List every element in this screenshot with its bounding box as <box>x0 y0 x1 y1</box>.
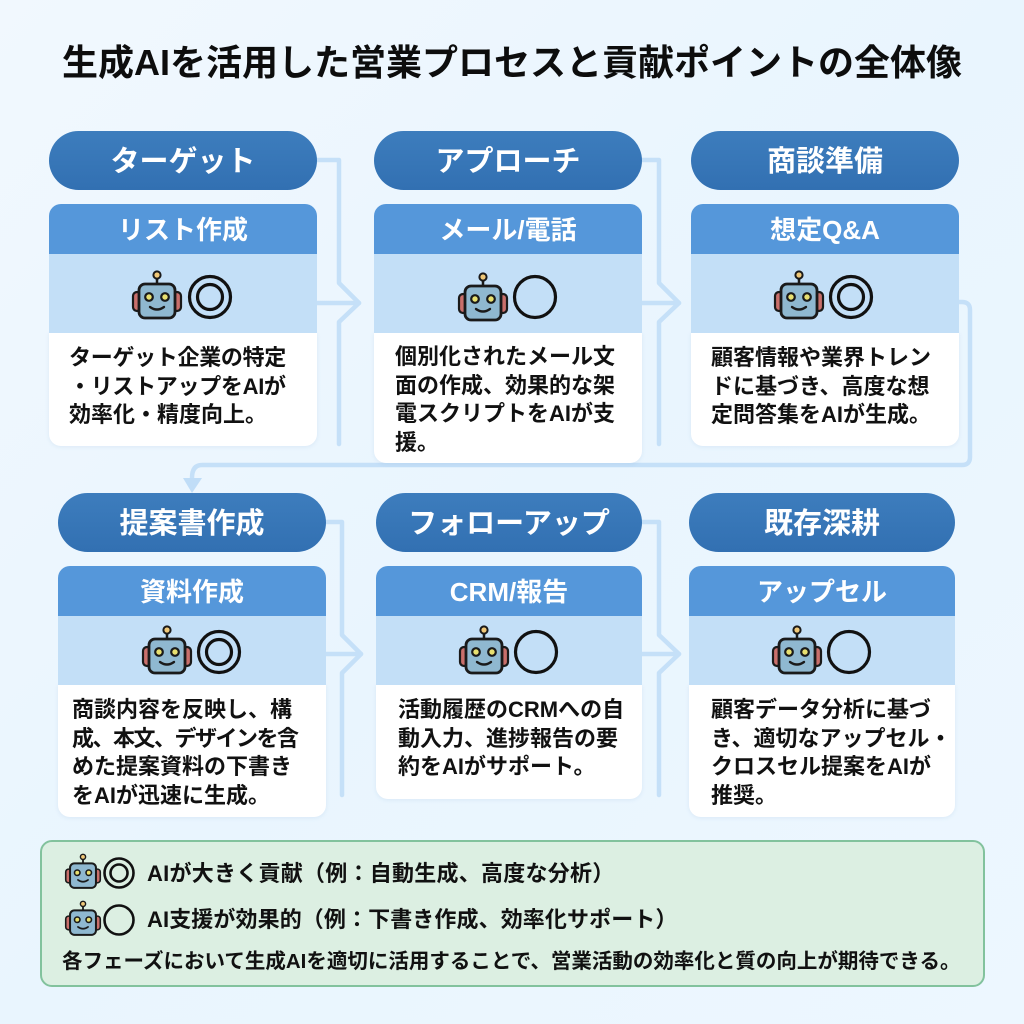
icon: large contribution <box>64 854 135 889</box>
panel: 提案書作成 <box>58 493 326 818</box>
panel: アプローチ: 電スクリプトをAIが支 <box>395 401 615 426</box>
panel: フォローアップ <box>376 493 642 800</box>
panel: 商談準備 <box>690 131 960 448</box>
panel: アプローチ: メール/電話 <box>439 215 577 245</box>
panel: ターゲット: 効率化・精度向上。 <box>69 402 267 427</box>
panel: 既存深耕: 推奨。 <box>711 782 777 808</box>
panel: legend <box>40 840 985 987</box>
panel: ターゲット <box>48 131 318 448</box>
panel: 提案書作成: 商談内容を反映し、構 <box>72 697 292 722</box>
panel: フォローアップ: 活動履歴のCRMへの自 <box>398 697 624 722</box>
title: 生成AIを活用した営業プロセスと貢献ポイントの全体像 <box>62 42 962 83</box>
panel: 提案書作成: をAIが迅速に生成。 <box>72 782 270 808</box>
panel: フォローアップ: 動入力、進捗報告の要 <box>398 726 618 750</box>
panel: アプローチ: 面の作成、効果的な架 <box>395 372 615 398</box>
panel: 商談準備: 商談準備 <box>767 146 883 178</box>
panel: 商談準備: ドに基づき、高度な想 <box>711 374 929 398</box>
panel: 商談準備: 想定Q&A <box>770 215 880 245</box>
panel: 提案書作成: 提案書作成 <box>119 508 264 540</box>
panel: アプローチ: 援。 <box>395 430 439 454</box>
panel: フォローアップ: フォローアップ <box>408 508 610 540</box>
panel: 既存深耕 <box>688 493 956 818</box>
panel: 既存深耕: アップセル <box>757 577 887 607</box>
panel: ターゲット: ターゲット企業の特定 <box>69 345 286 370</box>
panel: フォローアップ: 約をAIがサポート。 <box>398 754 596 779</box>
legend text: large contribution: AIが大きく貢献（例：自動生成、高度な分析） <box>147 861 615 886</box>
panel: 既存深耕: 顧客データ分析に基づ <box>711 697 931 722</box>
panel: ターゲット: ターゲット <box>110 146 256 178</box>
panel: 既存深耕: 既存深耕 <box>764 508 880 540</box>
panel: 既存深耕: クロスセル提案をAIが <box>711 754 931 779</box>
panel: 商談準備: 顧客情報や業界トレン <box>711 345 931 370</box>
panel: 既存深耕: き、適切なアップセル・ <box>711 726 951 750</box>
panel: アプローチ: アプローチ <box>435 146 580 178</box>
panel: 提案書作成: 成、本文、デザインを含 <box>72 726 298 750</box>
panel: ターゲット: ・リストアップをAIが <box>69 374 286 398</box>
panel: フォローアップ: CRM/報告 <box>450 577 568 607</box>
panel: 提案書作成: めた提案資料の下書き <box>72 754 292 779</box>
panel: 提案書作成: 資料作成 <box>140 577 244 607</box>
legend text: effective support: AI支援が効果的（例：下書き作成、効率化サポート） <box>147 907 678 932</box>
summary text: 各フェーズにおいて生成AIを適切に活用することで、営業活動の効率化と質の向上が期待できる。 <box>62 950 961 973</box>
icon: effective support <box>64 900 135 936</box>
panel: 商談準備: 定問答集をAIが生成。 <box>711 402 931 427</box>
panel: アプローチ: 個別化されたメール文 <box>395 344 615 369</box>
panel: アプローチ <box>374 131 642 464</box>
panel: ターゲット: リスト作成 <box>118 215 248 245</box>
